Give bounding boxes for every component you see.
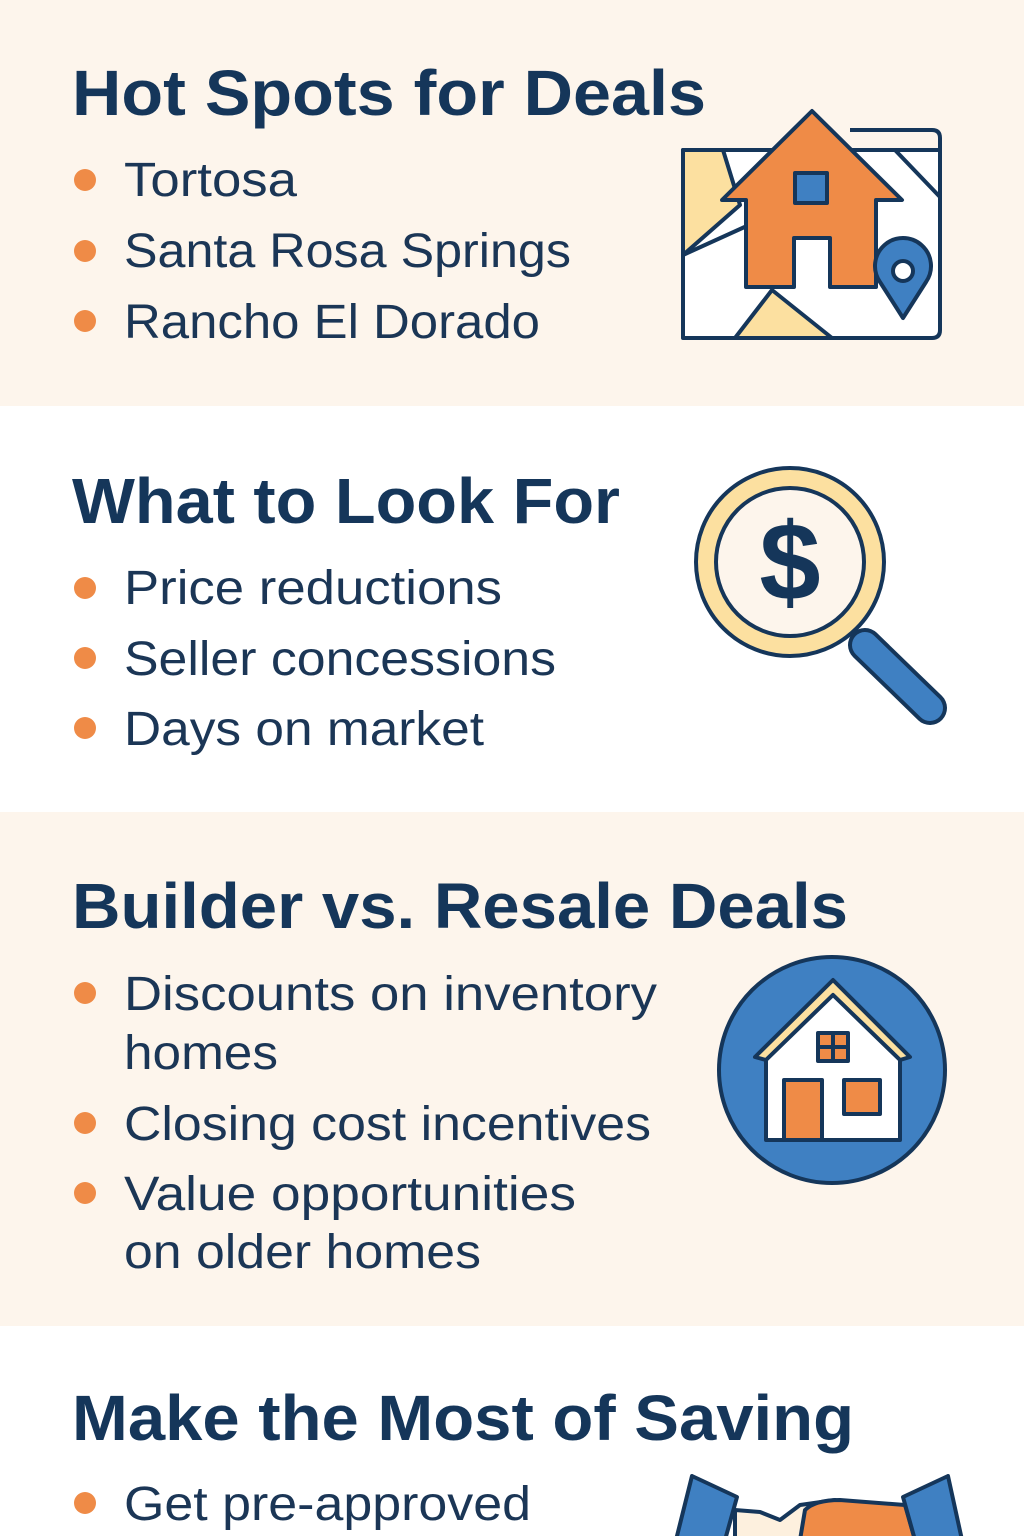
icon: house in circle [719,957,945,1183]
panel: make the most of saving [72,1382,962,1536]
bullet list: builder vs resale: Value opportunities [124,1168,576,1221]
bullet list: builder vs resale: homes [124,1027,278,1080]
panel: hot spots [72,57,940,349]
bullet list: hot spots [74,154,571,349]
bullet list: builder vs resale: on older homes [124,1226,481,1279]
bullet list: builder vs resale: Closing cost incentives [124,1098,651,1151]
bullet list: builder vs resale [74,968,657,1279]
bullet list: builder vs resale: Discounts on inventory [124,968,657,1021]
bullet list: what to look for [74,562,556,756]
icon: magnifier with dollar [696,468,930,708]
bullet list: hot spots: Santa Rosa Springs [124,225,571,278]
title: what to look for: What to Look For [72,465,620,537]
icon: handshake [676,1476,962,1536]
bullet list: hot spots: Rancho El Dorado [124,296,540,349]
bullet list: what to look for: Seller concessions [124,633,556,686]
panel: what to look for [72,465,930,756]
bullet list: what to look for: Days on market [124,703,484,756]
icon: map with house and pin [683,111,940,338]
title: builder vs resale: Builder vs. Resale Deals [72,870,848,942]
icon: magnifier with dollar: $ [759,501,821,624]
bullet list: what to look for: Price reductions [124,562,502,615]
panel: builder vs resale [72,870,945,1279]
title: make the most: Make the Most of Saving [72,1382,854,1454]
bullet list: hot spots: Tortosa [124,154,297,207]
title: hot spots: Hot Spots for Deals [72,57,706,129]
bullet list: make the most: Get pre-approved [124,1478,531,1531]
